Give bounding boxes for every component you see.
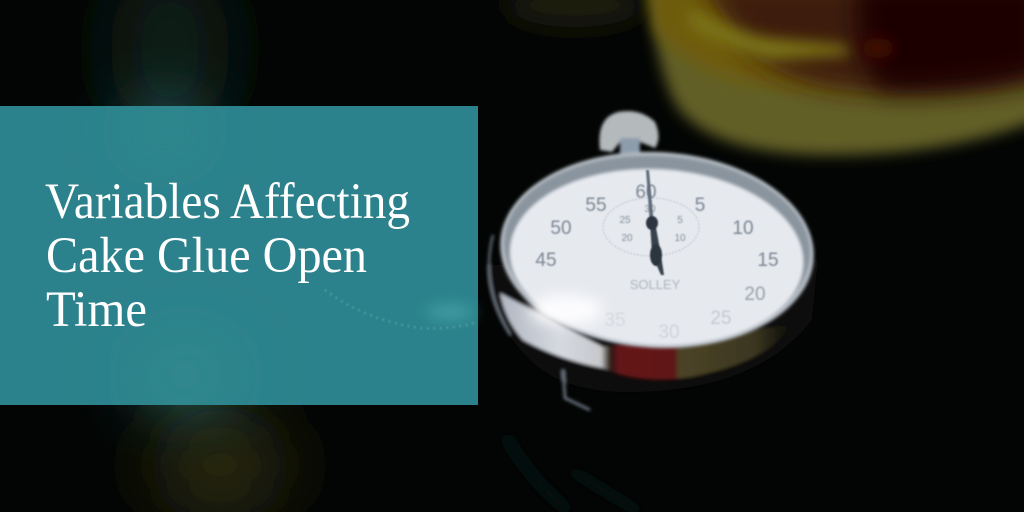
title bbox=[45, 174, 410, 338]
stopwatch dial numbers: 50 bbox=[550, 218, 572, 239]
stopwatch dial numbers: 10 bbox=[732, 218, 754, 239]
panel: teal title panel bbox=[0, 106, 478, 405]
stopwatch dial numbers: 35 bbox=[604, 310, 626, 331]
stopwatch dial numbers: 60 bbox=[635, 182, 657, 203]
stopwatch dial numbers: 45 bbox=[535, 250, 557, 271]
stopwatch small sub-dial: 10 bbox=[674, 233, 686, 244]
panel dotted highlight bbox=[325, 290, 478, 328]
stopwatch rotated dial bbox=[495, 144, 819, 356]
stopwatch small sub-dial: 5 bbox=[677, 215, 683, 226]
icon: stopwatch bbox=[486, 111, 819, 410]
stopwatch dial numbers: 30 bbox=[658, 322, 680, 343]
icon: blurred jar behind the stopwatch bbox=[648, 0, 1024, 155]
glare on glass bbox=[530, 295, 602, 325]
stopwatch small sub-dial: 25 bbox=[619, 215, 631, 226]
stopwatch small sub-dial bbox=[603, 198, 699, 256]
stopwatch crown bbox=[599, 111, 658, 156]
stopwatch dial numbers: 15 bbox=[757, 250, 779, 271]
title: Variables Affecting bbox=[45, 174, 410, 230]
stopwatch dial numbers bbox=[535, 182, 779, 343]
stopwatch dial numbers: 55 bbox=[585, 195, 607, 216]
stopwatch brand name: SOLLEY bbox=[630, 277, 681, 292]
stopwatch small sub-dial: 20 bbox=[621, 233, 633, 244]
title: Cake Glue Open bbox=[46, 228, 367, 284]
stopwatch hands bbox=[646, 170, 664, 275]
stopwatch dial numbers: 25 bbox=[710, 308, 732, 329]
stopwatch case bbox=[486, 235, 818, 410]
stopwatch dial numbers: 5 bbox=[695, 195, 705, 216]
blurred background colour patches bbox=[110, 0, 645, 512]
panel light streaks bbox=[131, 110, 230, 400]
stopwatch rim bbox=[495, 144, 819, 356]
title: Time bbox=[46, 282, 147, 338]
panel right highlight bbox=[426, 305, 474, 319]
reflection beneath stopwatch bbox=[505, 435, 640, 512]
stopwatch dial numbers: 20 bbox=[744, 284, 766, 305]
stopwatch small sub-dial: 30 bbox=[644, 204, 656, 215]
stopwatch dial face bbox=[505, 161, 808, 353]
